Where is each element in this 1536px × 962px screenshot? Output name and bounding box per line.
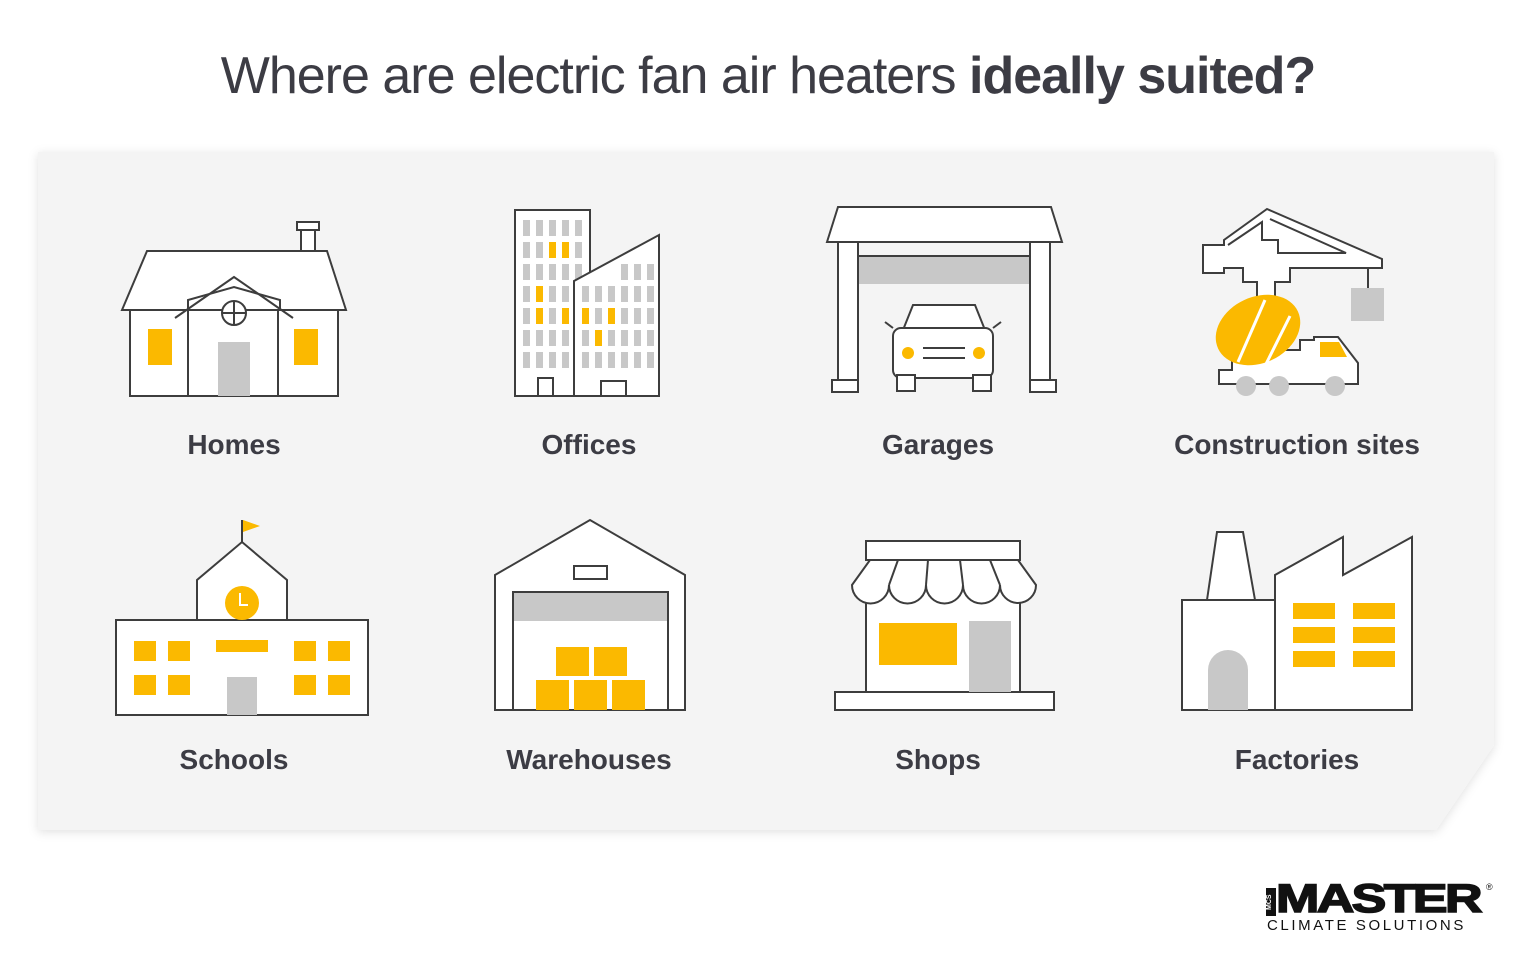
label: Shops: Shops: [895, 744, 981, 775]
icon: shop: [835, 541, 1054, 710]
label: Factories: Factories: [1235, 744, 1359, 775]
icon: home: [122, 222, 346, 396]
icon: factory: [1182, 532, 1412, 710]
icon: school: [116, 520, 368, 715]
label: Warehouses: Warehouses: [506, 744, 672, 775]
logo: MCS: [1266, 894, 1273, 910]
logo: ®: [1486, 882, 1493, 892]
label: Construction sites: Construction sites: [1174, 429, 1420, 460]
label: Homes: Homes: [187, 429, 281, 460]
icon: garage: [827, 207, 1062, 392]
label: Offices: Offices: [542, 429, 636, 460]
icon: offices: [515, 210, 659, 396]
title: Where are electric fan air heaters ideally suited?: [221, 47, 1315, 105]
logo: MASTER: [1276, 877, 1480, 921]
logo: CLIMATE SOLUTIONS: [1267, 917, 1466, 934]
label: Schools: Schools: [180, 744, 288, 775]
label: Garages: Garages: [882, 429, 994, 460]
icon: warehouse: [495, 520, 685, 710]
icon: construction: [1203, 209, 1384, 396]
logo: [1266, 877, 1493, 934]
